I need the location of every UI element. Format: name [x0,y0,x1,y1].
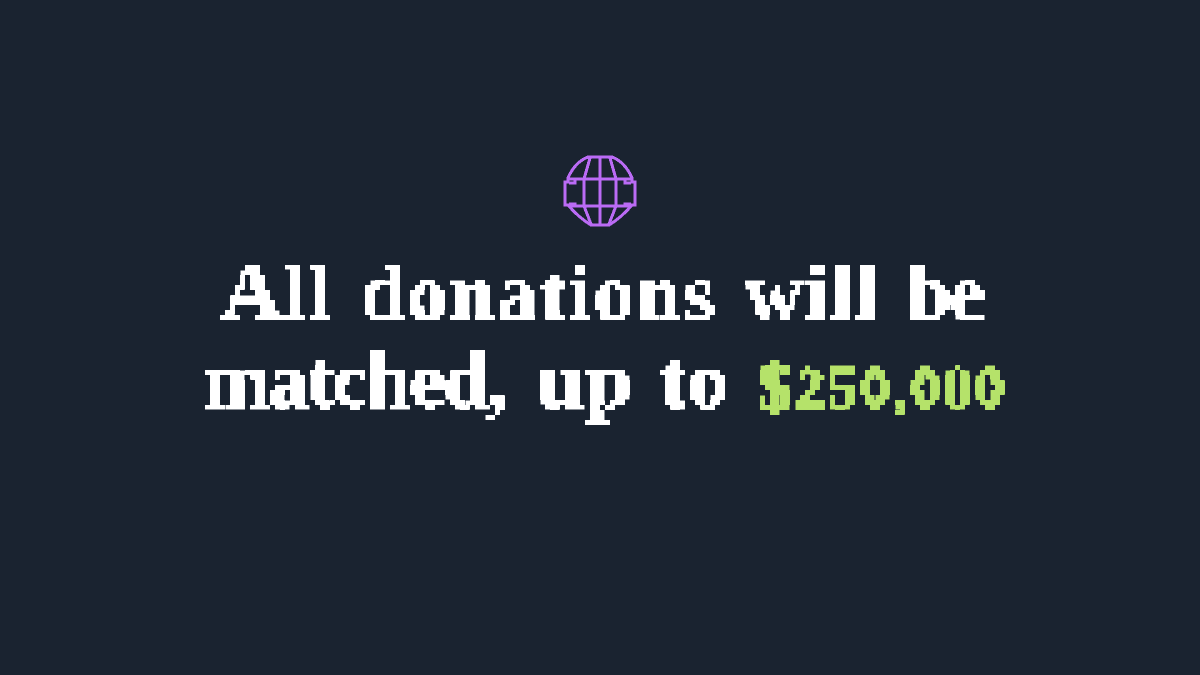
highlighted amount: $ [757,350,792,427]
headline [203,250,1008,427]
headline line 1: will [745,250,878,338]
icon: globe [565,157,635,225]
headline line 1 [220,250,985,338]
headline line 1: be [907,250,985,338]
headline line 1: All [220,250,332,338]
headline line 2 [203,337,728,425]
headline line 2: matched, [203,337,507,425]
highlighted amount: 250,000 [796,355,1008,420]
headline line 2: up [537,337,632,425]
headline line 2: to [660,337,728,425]
headline line 1: donations [360,250,715,338]
